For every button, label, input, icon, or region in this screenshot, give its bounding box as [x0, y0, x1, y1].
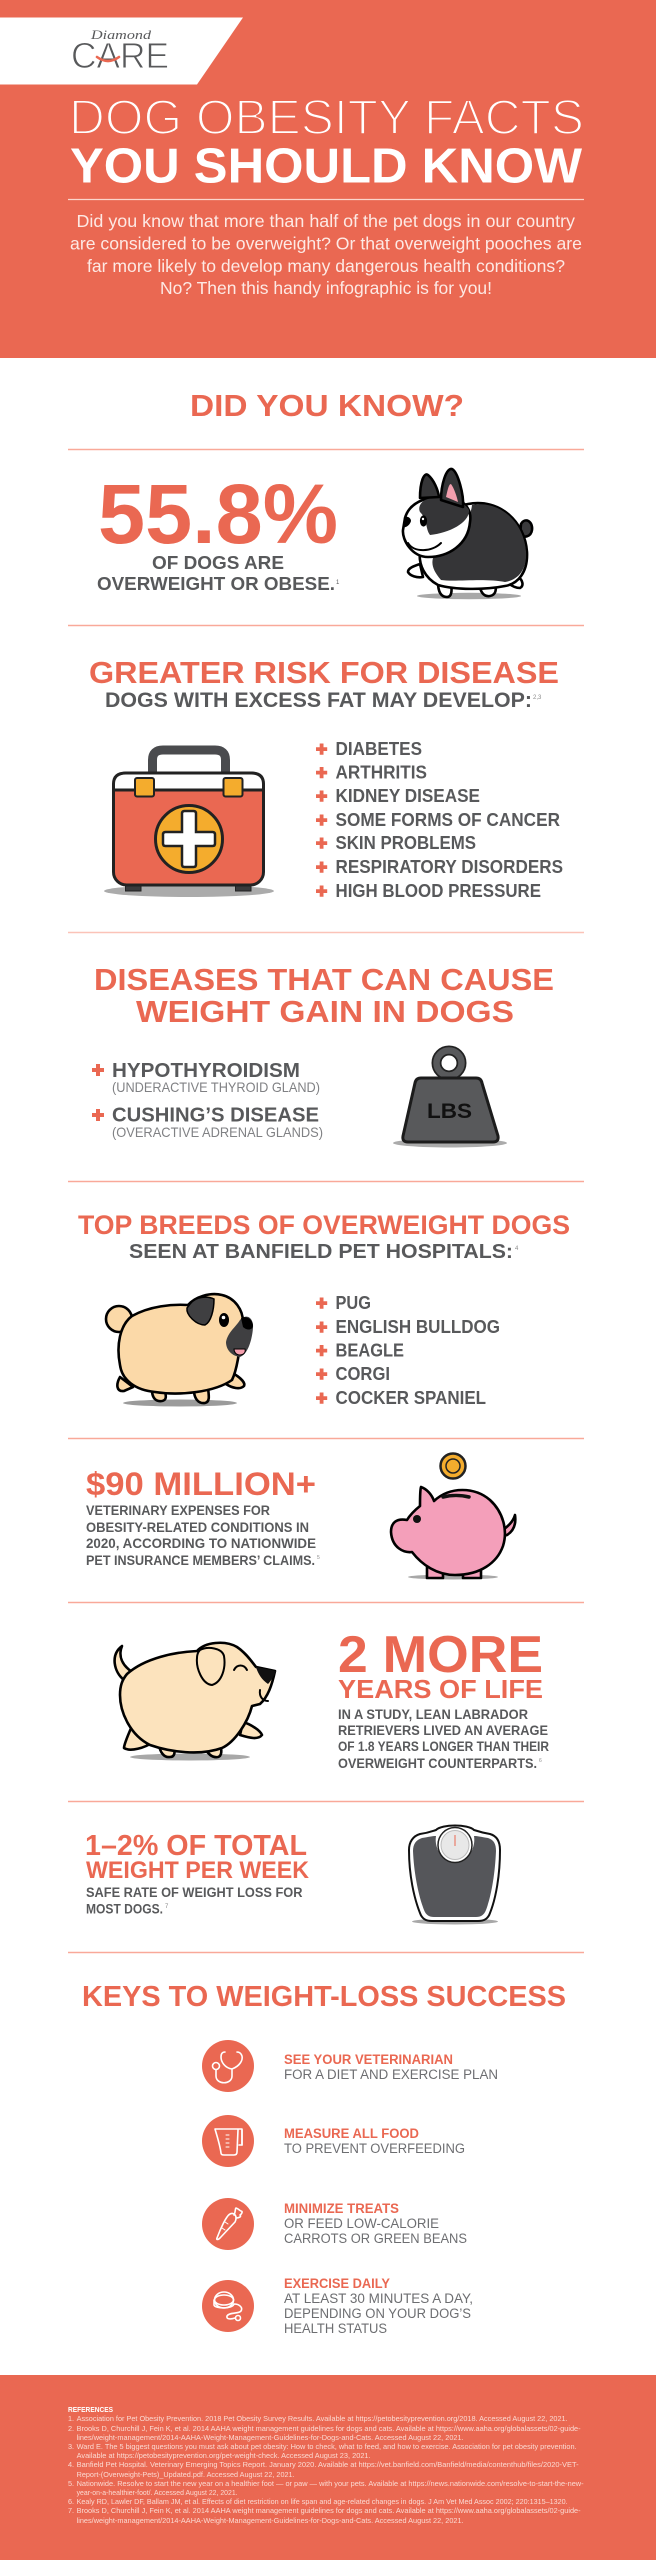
- stat text: YEARS OF LIFE: [338, 1674, 543, 1704]
- stat text: MOST DOGS.: [86, 1902, 163, 1916]
- stat: 55.8 percent: OVERWEIGHT OR OBESE.: [97, 574, 335, 594]
- stat text: 1–2% OF TOTAL: [85, 1830, 307, 1862]
- list: diseases: SKIN PROBLEMS: [336, 833, 476, 853]
- list: causes: (UNDERACTIVE THYROID GLAND): [112, 1079, 320, 1095]
- icon: bathroom scale: [409, 1826, 500, 1924]
- panel: top breeds: [68, 1210, 584, 1438]
- heading: 2,3: [533, 695, 542, 701]
- stat text: SAFE RATE OF WEIGHT LOSS FOR: [86, 1885, 303, 1900]
- references text: Brooks D, Churchill J, Fein K, et al. 2014 AAHA weight management guidelines for dogs and cats. Available at https://www.aaha.org/globalassets/02-guide-: [77, 2424, 581, 2433]
- references text: 7.: [68, 2506, 74, 2515]
- logo banner: Diamond: [90, 27, 152, 42]
- list: diseases: DIABETES: [336, 739, 422, 759]
- panel: did you know: [68, 388, 584, 626]
- references text: lines/weight-management/2014-AAHA-Weight-Management-Guidelines-for-Dogs-and-Cats. Accessed August 22, 2021.: [77, 2433, 464, 2442]
- references text: Nationwide. Resolve to start the new year on a healthier foot — or paw — with your pets. Available at https://news.nationwide.com/resolve-to-start-the-new-: [77, 2479, 584, 2488]
- references text: 4.: [68, 2460, 74, 2469]
- title: YOU SHOULD KNOW: [70, 140, 583, 194]
- list: diseases: KIDNEY DISEASE: [336, 786, 480, 806]
- panel: safe rate of weight loss: [68, 1826, 584, 1952]
- key: see your veterinarian: [202, 2040, 498, 2092]
- intro text: far more likely to develop many dangerous health conditions?: [87, 256, 565, 276]
- title: [69, 91, 584, 194]
- panel: header: [0, 0, 656, 358]
- stat text: IN A STUDY, LEAN LABRADOR: [338, 1707, 528, 1722]
- icon: piggy bank: [391, 1454, 515, 1580]
- key: exercise daily: HEALTH STATUS: [284, 2321, 387, 2336]
- list: causes: HYPOTHYROIDISM: [112, 1060, 300, 1082]
- references text: 1.: [68, 2414, 74, 2423]
- stat: 55.8 percent: OF DOGS ARE: [152, 553, 284, 573]
- key: minimize treats: CARROTS OR GREEN BEANS: [284, 2231, 467, 2246]
- intro text: Did you know that more than half of the pet dogs in our country: [76, 211, 575, 231]
- key: exercise daily: [202, 2276, 473, 2336]
- list: causes: [92, 1060, 323, 1140]
- heading: WEIGHT GAIN IN DOGS: [136, 994, 514, 1029]
- heading: 4: [515, 1246, 519, 1252]
- references text: Banfield Pet Hospital. Veterinary Emerging Topics Report. January 2020. Available at https://vet.banfield.com/Banfield/media/contenthub/files/2020-VET-: [77, 2460, 579, 2469]
- icon: medical kit: [104, 750, 274, 897]
- references text: Ward E. The 5 biggest questions you must ask about pet obesity: How to check, what to feed, and how to exercise. Association for pet obesity prevention.: [77, 2442, 577, 2451]
- intro text: [70, 211, 582, 298]
- panel: greater risk for disease: [68, 655, 584, 932]
- heading: KEYS TO WEIGHT-LOSS SUCCESS: [82, 1981, 566, 2013]
- icon: boston terrier dog: [403, 469, 532, 599]
- heading: [78, 1210, 570, 1263]
- list: diseases: ARTHRITIS: [336, 762, 427, 782]
- heading: DID YOU KNOW?: [190, 388, 464, 423]
- list: breeds: BEAGLE: [336, 1340, 404, 1360]
- heading: TOP BREEDS OF OVERWEIGHT DOGS: [78, 1210, 570, 1240]
- key: minimize treats: OR FEED LOW-CALORIE: [284, 2216, 439, 2231]
- list: breeds: COCKER SPANIEL: [336, 1388, 486, 1408]
- stat text: [86, 1466, 320, 1568]
- key: see your veterinarian: FOR A DIET AND EXERCISE PLAN: [284, 2067, 498, 2082]
- list: breeds: CORGI: [336, 1364, 390, 1384]
- stat text: OBESITY-RELATED CONDITIONS IN: [86, 1520, 309, 1535]
- key: exercise daily: DEPENDING ON YOUR DOG’S: [284, 2306, 471, 2321]
- heading: GREATER RISK FOR DISEASE: [89, 655, 559, 690]
- references text: 5.: [68, 2479, 74, 2488]
- references text: year-on-a-healthier-foot/. Accessed August 22, 2021.: [77, 2488, 238, 2497]
- list: breeds: ENGLISH BULLDOG: [336, 1317, 500, 1337]
- logo banner: [0, 18, 243, 84]
- icon: pug: [106, 1294, 253, 1406]
- references text: REFERENCES: [68, 2405, 113, 2414]
- stat text: $90 MILLION+: [86, 1466, 316, 1502]
- heading: SEEN AT BANFIELD PET HOSPITALS:: [129, 1240, 513, 1263]
- key: measure all food: TO PREVENT OVERFEEDING: [284, 2141, 465, 2156]
- stat text: OVERWEIGHT COUNTERPARTS.: [338, 1756, 537, 1771]
- panel: 90 million: [68, 1454, 584, 1602]
- heading: DOGS WITH EXCESS FAT MAY DEVELOP:: [105, 689, 532, 712]
- references text: Kealy RD, Lawler DF, Ballam JM, et al. Effects of diet restriction on life span and age-related changes in dogs. J Am Vet Med Assoc 2002; 220:1315–1320.: [77, 2497, 568, 2506]
- stat text: VETERINARY EXPENSES FOR: [86, 1503, 270, 1518]
- intro text: No? Then this handy infographic is for you!: [160, 278, 492, 298]
- list: breeds: PUG: [336, 1293, 371, 1313]
- icon: labrador dog: [115, 1643, 276, 1760]
- stat: 55.8 percent: 55.8%: [98, 467, 338, 561]
- stat text: 2020, ACCORDING TO NATIONWIDE: [86, 1536, 316, 1551]
- key: exercise daily: AT LEAST 30 MINUTES A DAY,: [284, 2291, 473, 2306]
- stat text: 5: [317, 1555, 320, 1561]
- references text: 2.: [68, 2424, 74, 2433]
- stat text: 2 MORE: [338, 1626, 543, 1684]
- stat text: 6: [539, 1758, 542, 1764]
- stat text: OF 1.8 YEARS LONGER THAN THEIR: [338, 1739, 549, 1754]
- title: DOG OBESITY FACTS: [69, 91, 584, 145]
- key: measure all food: MEASURE ALL FOOD: [284, 2126, 419, 2141]
- list: diseases: HIGH BLOOD PRESSURE: [336, 881, 541, 901]
- stat text: PET INSURANCE MEMBERS’ CLAIMS.: [86, 1553, 315, 1568]
- panel: keys to weight-loss success: [82, 1981, 566, 2336]
- icon: LBS weight: LBS: [427, 1100, 472, 1123]
- icon: LBS weight: [393, 1050, 507, 1148]
- stat text: [338, 1626, 549, 1771]
- stat text: [85, 1830, 310, 1916]
- heading: DISEASES THAT CAN CAUSE: [94, 962, 554, 997]
- key: exercise daily: EXERCISE DAILY: [284, 2276, 390, 2291]
- heading: [94, 962, 554, 1029]
- references text: Brooks D, Churchill J, Fein K, et al. 2014 AAHA weight management guidelines for dogs and cats. Available at https://www.aaha.org/globalassets/02-guide-: [77, 2506, 581, 2515]
- panel: references footer: [0, 2375, 656, 2560]
- references text: lines/weight-management/2014-AAHA-Weight-Management-Guidelines-for-Dogs-and-Cats. Accessed August 22, 2021.: [77, 2516, 464, 2525]
- references text: Report-(Overweight-Pets)_Updated.pdf. Accessed August 22, 2021.: [77, 2470, 295, 2479]
- list: diseases: SOME FORMS OF CANCER: [336, 810, 560, 830]
- stat text: WEIGHT PER WEEK: [86, 1857, 310, 1884]
- list: diseases: [316, 739, 563, 901]
- references text: 3.: [68, 2442, 74, 2451]
- stat text: RETRIEVERS LIVED AN AVERAGE: [338, 1723, 548, 1738]
- references text: Available at https://petobesityprevention.org/pet-weight-check. Accessed August 23, 2021.: [77, 2451, 371, 2460]
- stat text: 7: [165, 1904, 169, 1910]
- panel: diseases that cause weight gain: [68, 962, 584, 1182]
- key: minimize treats: [202, 2198, 467, 2250]
- panel: 2 more years of life: [68, 1626, 584, 1802]
- list: breeds: [316, 1293, 500, 1408]
- logo banner: CARE: [71, 35, 169, 76]
- key: minimize treats: MINIMIZE TREATS: [284, 2201, 399, 2216]
- list: causes: (OVERACTIVE ADRENAL GLANDS): [112, 1124, 323, 1140]
- references text: Association for Pet Obesity Prevention. 2018 Pet Obesity Survey Results. Available at https://petobesityprevention.org/2018. Accessed August 22, 2021.: [77, 2414, 568, 2423]
- stat: 55.8 percent: 1: [336, 580, 340, 586]
- references text: 6.: [68, 2497, 74, 2506]
- heading: [89, 655, 559, 712]
- intro text: are considered to be overweight? Or that overweight pooches are: [70, 234, 582, 254]
- list: causes: CUSHING’S DISEASE: [112, 1104, 319, 1126]
- list: diseases: RESPIRATORY DISORDERS: [336, 857, 563, 877]
- key: see your veterinarian: SEE YOUR VETERINARIAN: [284, 2052, 453, 2067]
- key: measure all food: [202, 2115, 465, 2167]
- references text: [68, 2405, 584, 2525]
